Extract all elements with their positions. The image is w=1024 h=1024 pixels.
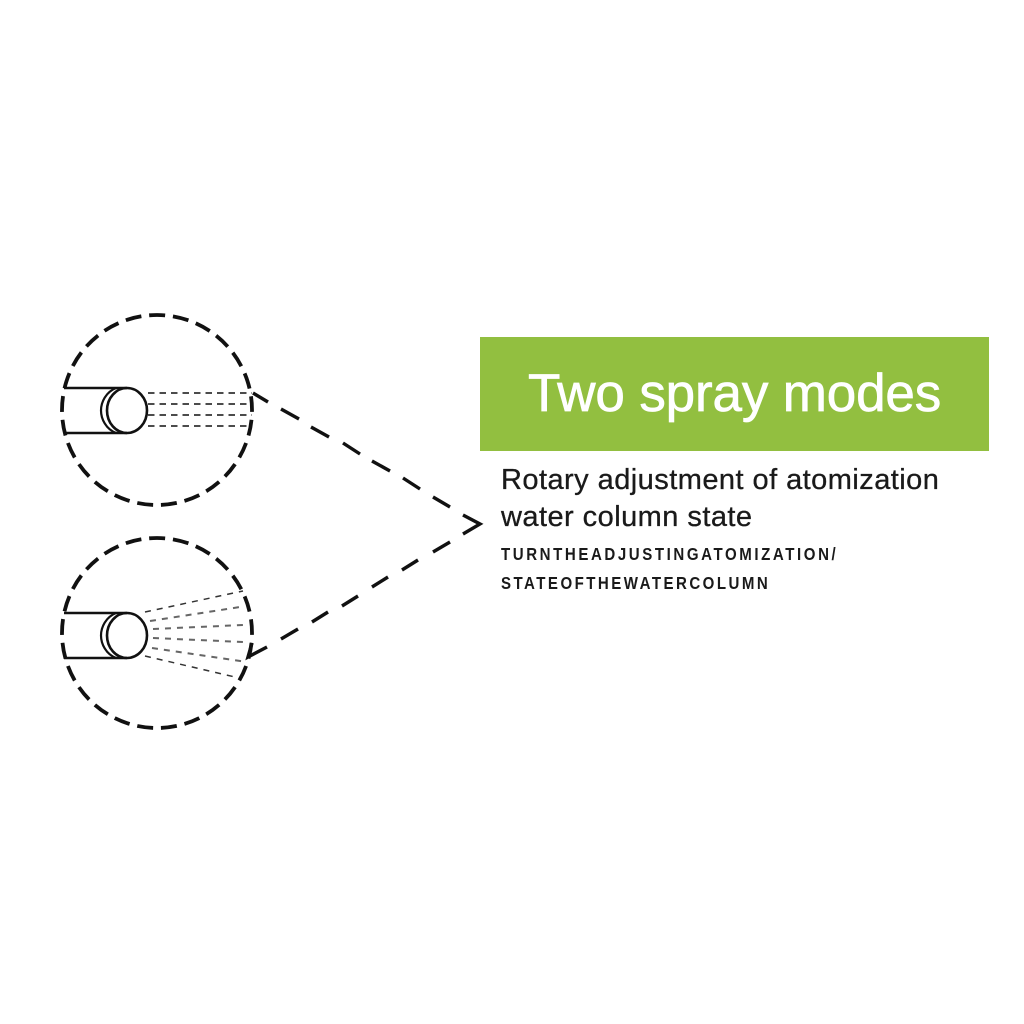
text block: uppercase caption: TURNTHEADJUSTINGATOMIZATION/ bbox=[501, 544, 838, 564]
text block: uppercase caption: STATEOFTHEWATERCOLUMN bbox=[501, 572, 770, 592]
text block: description bbox=[500, 464, 939, 533]
heading banner bbox=[480, 337, 989, 451]
title: Two spray modes bbox=[528, 364, 941, 423]
arrow: dashed connector from nozzles to text bbox=[248, 393, 480, 657]
text block: uppercase caption bbox=[501, 544, 838, 592]
text block: description: Rotary adjustment of atomization bbox=[501, 464, 939, 496]
text block: description: water column state bbox=[501, 501, 752, 533]
icon: fan atomized spray nozzle bbox=[62, 538, 252, 728]
icon: straight column spray nozzle bbox=[62, 315, 252, 505]
